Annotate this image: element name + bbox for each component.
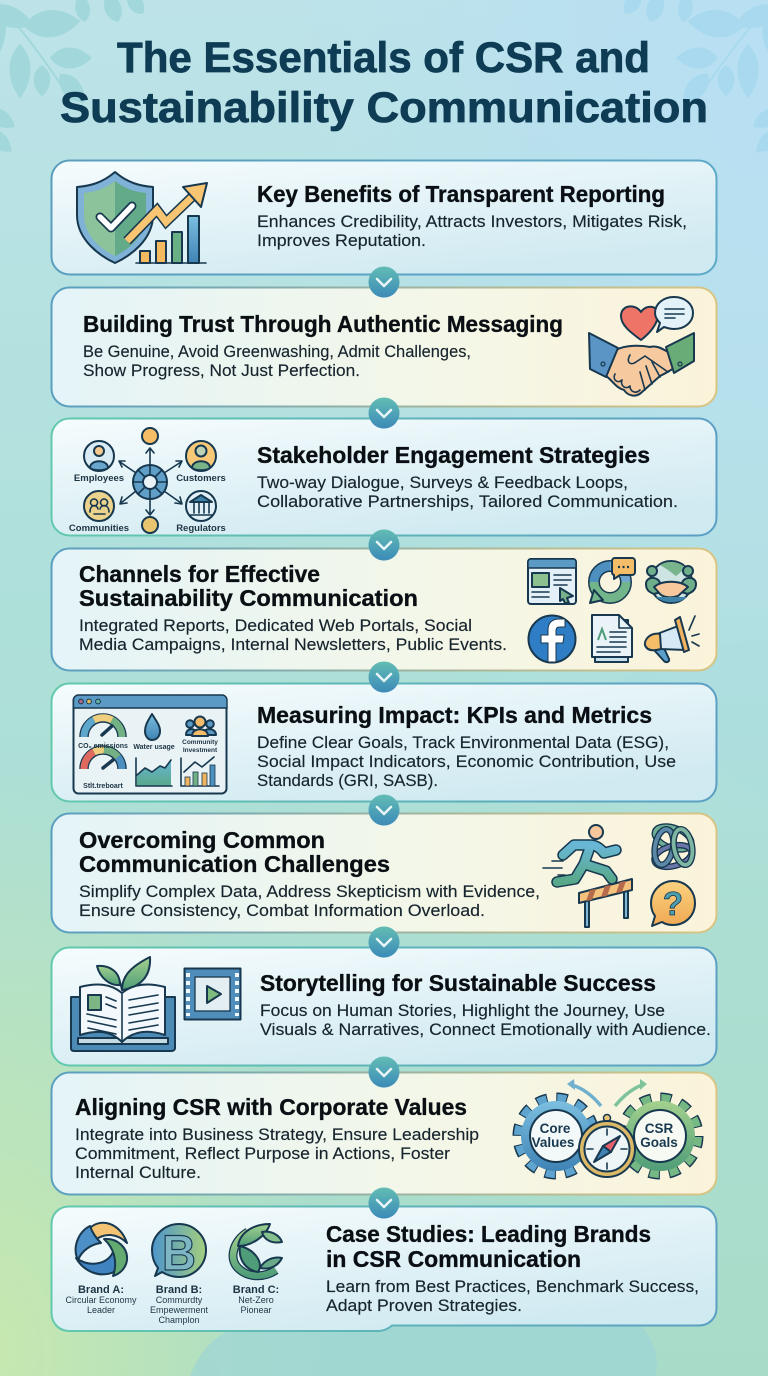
body text [257, 734, 676, 790]
icon: facebook [528, 616, 576, 662]
connector arrows [368, 266, 400, 1218]
body text: Simplify Complex Data, Address Skepticism with Evidence, [79, 883, 540, 901]
body text: Define Clear Goals, Track Environmental Data (ESG), [257, 734, 669, 752]
brand A caption [65, 1284, 137, 1315]
body text [75, 1126, 479, 1182]
dashboard labels: Water usage [133, 744, 175, 751]
body text [79, 617, 507, 654]
body text: Be Genuine, Avoid Greenwashing, Admit Challenges, [83, 343, 471, 361]
stakeholder labels [69, 473, 226, 534]
body text: Media Campaigns, Internal Newsletters, Public Events. [79, 636, 507, 654]
heading [79, 827, 390, 877]
body text: Internal Culture. [75, 1164, 201, 1182]
heading: Channels for Effective [79, 561, 320, 587]
brand B caption [150, 1284, 209, 1325]
panel: storytelling [52, 948, 716, 1066]
dashboard labels: Investment [183, 747, 218, 754]
body text [257, 474, 678, 511]
icon: runner jumping a hurdle [543, 825, 632, 927]
heading: in CSR Communication [326, 1246, 581, 1272]
dashboard labels: Stlt.treboart [83, 783, 124, 790]
heading: Building Trust Through Authentic Messaging [83, 311, 563, 337]
heading: Key Benefits of Transparent Reporting [257, 181, 665, 207]
dashboard labels [78, 739, 218, 790]
dashboard labels: Community [182, 739, 218, 746]
panel: case studies [52, 1206, 716, 1331]
heading: Overcoming Common [79, 827, 325, 853]
stakeholder labels: Employees [74, 473, 124, 484]
panel: channels [52, 548, 716, 670]
panel: overcoming challenges [52, 814, 716, 932]
title: The Essentials of CSR and [117, 34, 650, 82]
title [60, 34, 708, 132]
brand C caption: Pionear [240, 1305, 272, 1315]
icon: brand C leaf logo [233, 1224, 282, 1276]
body text: Collaborative Partnerships, Tailored Communication. [257, 493, 678, 511]
body text [83, 343, 471, 380]
heading [79, 561, 418, 611]
panel: building trust [52, 288, 716, 406]
panel: stakeholder engagement [52, 418, 716, 536]
panel: aligning CSR [52, 1072, 716, 1194]
body text: Integrate into Business Strategy, Ensure Leadership [75, 1126, 479, 1144]
heading [326, 1221, 651, 1272]
body text [257, 213, 687, 250]
heading: Sustainability Communication [79, 585, 418, 611]
body text: Visuals & Narratives, Connect Emotionally with Audience. [260, 1021, 711, 1039]
body text: Commitment, Reflect Purpose in Actions, Foster [75, 1145, 451, 1163]
icon: open book with sprout [71, 957, 175, 1051]
stakeholder labels: Regulators [176, 523, 226, 534]
heading: Case Studies: Leading Brands [326, 1221, 651, 1247]
stakeholder labels: Customers [176, 473, 226, 484]
icon: tangled knot [652, 822, 695, 871]
title: Sustainability Communication [60, 84, 708, 132]
brand B caption: Commurdty [156, 1295, 203, 1305]
heading: Aligning CSR with Corporate Values [75, 1094, 467, 1120]
icon: globe with handshake [646, 561, 696, 603]
icon: gears and compass [518, 1079, 698, 1177]
gear labels: Goals [640, 1135, 678, 1150]
body text: Show Progress, Not Just Perfection. [83, 362, 360, 380]
body text: Integrated Reports, Dedicated Web Portals, Social [79, 617, 472, 635]
body text [260, 1002, 711, 1039]
brand B caption: Empewerment [150, 1305, 209, 1315]
icon: KPI dashboard [74, 695, 227, 794]
brand C caption [233, 1284, 279, 1315]
brand A caption: Circular Economy [65, 1295, 137, 1305]
body text: Enhances Credibility, Attracts Investors, Mitigates Risk, [257, 213, 687, 231]
icon: question bubble: ? [663, 885, 683, 922]
heading: Stakeholder Engagement Strategies [257, 442, 650, 468]
body text: Focus on Human Stories, Highlight the Journey, Use [260, 1002, 665, 1020]
gear labels: CSR [645, 1121, 673, 1136]
icon: brand A logo [76, 1223, 127, 1276]
heading: Measuring Impact: KPIs and Metrics [257, 702, 652, 728]
stakeholder labels: Communities [69, 523, 129, 534]
icon: web portal [528, 559, 576, 604]
dashboard labels: CO₂ emissions [78, 743, 128, 750]
icon: social chat ring [590, 558, 635, 603]
brand A caption: Leader [87, 1305, 115, 1315]
icon: film strip with play button [184, 968, 240, 1020]
gear labels: Values [532, 1135, 574, 1150]
icon: question bubble [651, 881, 695, 926]
gear labels [532, 1121, 678, 1150]
icon: stakeholder network [69, 428, 226, 534]
panel: measuring impact [52, 684, 716, 802]
body text: Two-way Dialogue, Surveys & Feedback Loops, [257, 474, 628, 492]
body text: Social Impact Indicators, Economic Contribution, Use [257, 753, 676, 771]
brand C caption: Brand C: [233, 1284, 279, 1296]
brand B caption: Brand B: [156, 1284, 202, 1296]
body text: Ensure Consistency, Combat Information Overload. [79, 902, 485, 920]
icon: handshake with heart and chat bubble [589, 297, 694, 396]
brand C caption: Net-Zero [238, 1295, 274, 1305]
icon: brand B logo: B [162, 1225, 196, 1281]
body text: Learn from Best Practices, Benchmark Success, [326, 1278, 699, 1296]
panel: key benefits [52, 160, 716, 274]
body text: Adapt Proven Strategies. [326, 1297, 522, 1315]
gear labels: Core [540, 1121, 571, 1136]
body text [326, 1278, 699, 1315]
body text [79, 883, 540, 920]
icon: brand B logo [152, 1224, 206, 1281]
body text: Improves Reputation. [257, 232, 426, 250]
brand A caption: Brand A: [78, 1284, 124, 1296]
icon: shield with rising chart [77, 172, 207, 263]
body text: Standards (GRI, SASB). [257, 772, 438, 790]
heading: Communication Challenges [79, 851, 390, 877]
heading: Storytelling for Sustainable Success [260, 970, 656, 996]
brand B caption: Champlon [158, 1315, 200, 1325]
icon: megaphone [645, 616, 699, 662]
icon: report document [592, 615, 632, 662]
